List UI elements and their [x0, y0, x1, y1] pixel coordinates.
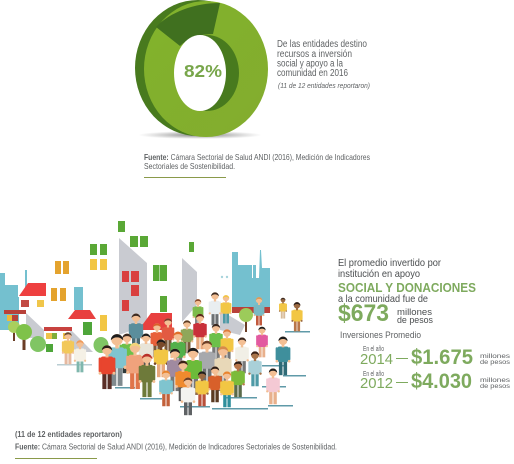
city: right grey building [182, 258, 197, 322]
figure: 2014: 2014 [360, 351, 393, 368]
donut dark wedge (18%) [156, 3, 220, 46]
donut ground shadow [138, 131, 262, 139]
city: small house and trees [4, 310, 46, 352]
figure: 2012: 2012 [360, 375, 393, 392]
text: a la comunidad: a la comunidad fue de [338, 293, 428, 305]
city: lower house [44, 327, 93, 352]
crowd of people [62, 292, 303, 415]
city: centre house [68, 287, 108, 353]
intro text [338, 257, 441, 280]
donut hole inner wall [175, 35, 239, 111]
donut chart: 82% [135, 0, 268, 139]
donut light ring (82%) [144, 1, 268, 137]
figure: $673 millones [338, 300, 433, 327]
city: left teal skyline [0, 270, 27, 330]
city: roof behind crowd [143, 313, 172, 330]
donut value: 82% [184, 61, 222, 81]
figure: $673 millones: millones [397, 307, 432, 318]
ground shadows [57, 331, 310, 410]
donut hole [174, 35, 226, 111]
description text for 82%: recursos a inversión [277, 49, 352, 60]
description text for 82% [277, 39, 370, 90]
figure: $673 millones: $673 [338, 300, 389, 327]
city: right teal skyline [220, 250, 270, 335]
city: floating windows left [51, 244, 107, 301]
figure: $673 millones: de pesos [397, 315, 433, 326]
description text for 82%: (11 de 12 entidades reportaron) [278, 81, 370, 90]
source note, top: Fuente: Cámara Sectorial de Salud ANDI (2016), Medición de Indicadores [144, 152, 370, 162]
source note, top [144, 152, 370, 178]
figure: 2012: En el año [363, 369, 384, 378]
figure: 2014 [360, 344, 511, 369]
source note, top: Sectoriales de Sostenibilidad. [144, 161, 235, 171]
figure: 2012: millones [480, 377, 511, 384]
heading: social y donaciones: SOCIAL Y DONACIONES [338, 281, 476, 295]
donut dark back edge [135, 0, 261, 136]
intro text: institución en apoyo [338, 268, 420, 280]
description text for 82%: De las entidades destino [277, 39, 367, 50]
source note, bottom: (11 de 12 entidades reportaron) [15, 429, 122, 439]
figure: 2012 [360, 369, 511, 393]
figure: 2014: millones [480, 353, 511, 360]
intro text: El promedio invertido por [338, 257, 441, 269]
description text for 82%: social y apoyo a la [277, 58, 343, 70]
subheading: inversiones promedio: Inversiones Promedio [340, 330, 421, 340]
figure: 2014: de pesos [480, 359, 511, 366]
city: tall grey building [118, 221, 148, 335]
city: red roof house [19, 283, 46, 312]
figure: 2014: En el año [363, 344, 384, 353]
city: green windows [153, 242, 194, 312]
source note, bottom: Fuente: Cámara Sectorial de Salud ANDI (2016), Medición de Indicadores Sectoriales de Sostenibilidad. [15, 442, 337, 452]
source note, bottom [15, 429, 337, 459]
investment summary text [338, 257, 511, 393]
figure: 2014: $1.675 [411, 346, 473, 369]
illustration: city and crowd [0, 221, 310, 415]
description text for 82%: comunidad en 2016 [277, 68, 348, 79]
figure: 2012: de pesos [480, 383, 511, 390]
figure: 2012: $4.030 [411, 370, 472, 393]
